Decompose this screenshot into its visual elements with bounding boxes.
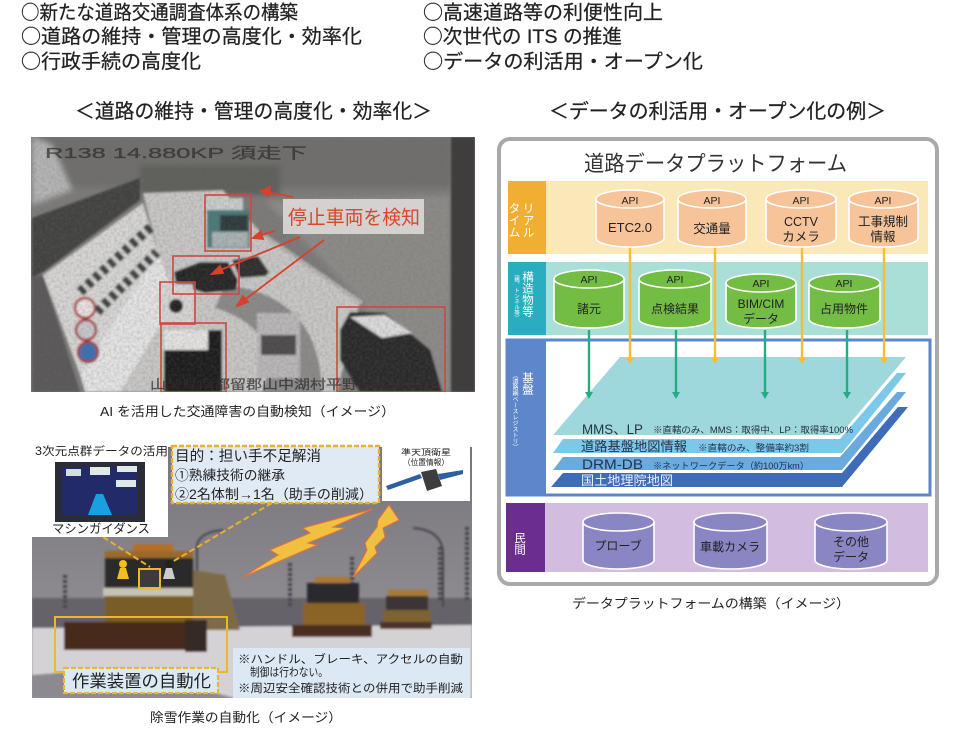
panel: machine guidance — [32, 443, 168, 537]
connector lines — [103, 503, 272, 567]
database: BIM/CIM data: BIM/CIM — [738, 297, 784, 311]
data layers: ※直轄のみ、MMS：取得中、LP：取得率100% — [653, 424, 853, 435]
caption: data platform: データプラットフォームの構築（イメージ） — [572, 596, 850, 611]
objectives list: left column — [21, 0, 362, 74]
band: structures: （橋、トンネル等） — [513, 271, 520, 320]
callout: purpose: ①熟練技術の継承 — [175, 468, 286, 483]
panel: machine guidance: 3次元点群データの活用 — [35, 444, 168, 458]
note panel: ※ハンドル、ブレーキ、アクセルの自動 — [238, 652, 463, 666]
database: CCTV camera — [766, 190, 836, 247]
database: construction restrictions — [849, 190, 918, 247]
objectives list: left column: ○行政手続の高度化 — [21, 45, 201, 74]
database: occupancy objects: 占用物件 — [820, 301, 868, 316]
note panel: 制御は行わない。 — [250, 665, 328, 679]
database: specifications: 諸元 — [577, 301, 601, 316]
icon: operator markers — [117, 560, 175, 579]
callout: purpose: ②2名体制→1名（助手の削減） — [175, 486, 373, 502]
database: other data: データ — [833, 549, 869, 564]
heading: data utilisation: ＜データの利活用・オープン化の例＞ — [549, 100, 886, 123]
photo: AI incident detection — [31, 137, 475, 392]
caption: AI detection: AI を活用した交通障害の自動検知（イメージ） — [100, 404, 395, 419]
objectives list: right column: ○データの利活用・オープン化 — [423, 45, 703, 74]
note panel — [233, 648, 470, 698]
database: ETC2.0: API — [622, 195, 638, 207]
band: realtime: リアル — [521, 202, 535, 238]
band: structures: 構造物等 — [521, 271, 534, 317]
database: traffic volume: API — [704, 195, 720, 207]
objectives list: left column: ○道路の維持・管理の高度化・効率化 — [21, 20, 362, 49]
monitor highlight frame — [139, 569, 160, 588]
detection arrows — [212, 187, 324, 306]
database: construction restrictions: 工事規制 — [858, 214, 908, 229]
photo: snow removal automation — [32, 443, 472, 698]
panel: QZSS satellite: 準天頂衛星 — [401, 447, 451, 457]
database: traffic volume — [678, 190, 746, 247]
callout: purpose: 目的：担い手不足解消 — [175, 448, 321, 465]
database: onboard camera — [694, 513, 767, 569]
heading: road maintenance: ＜道路の維持・管理の高度化・効率化＞ — [75, 100, 432, 123]
camera overlay text: R138 14.880KP 須走下 — [45, 145, 307, 162]
band: private sector — [506, 503, 928, 572]
database: other data: その他 — [833, 535, 869, 549]
database: construction restrictions: 情報 — [870, 230, 896, 244]
detection boxes — [160, 195, 445, 392]
database: inspection results: 点検結果 — [651, 302, 699, 316]
panel: QZSS satellite — [382, 445, 470, 501]
panel: machine guidance: マシンガイダンス — [52, 521, 150, 536]
data layers: 国土地理院地図 — [581, 473, 673, 488]
yellow arrows — [626, 247, 888, 364]
database: inspection results — [639, 270, 711, 328]
database: CCTV camera: API — [793, 195, 809, 207]
work equipment highlight frame — [55, 617, 227, 672]
data layers — [551, 357, 908, 488]
note panel: ※周辺安全確認技術との併用で助手削減 — [238, 681, 464, 695]
database: traffic volume: 交通量 — [693, 222, 731, 236]
band: structures — [508, 262, 928, 335]
band: base registry — [507, 340, 930, 495]
icon: lightning bolt to lead truck — [243, 509, 373, 577]
database: BIM/CIM data: データ — [743, 311, 779, 326]
database: ETC2.0 — [596, 190, 664, 247]
database: probe — [583, 513, 654, 569]
data layers: MMS、LP — [582, 421, 643, 437]
database: specifications: API — [581, 274, 597, 286]
caption: snow removal: 除雪作業の自動化（イメージ） — [150, 710, 342, 725]
band: base registry: （道路網ベースレジストリ） — [511, 372, 518, 450]
panel: QZSS satellite: （位置情報） — [403, 457, 449, 467]
data layers: ※直轄のみ、整備率約3割 — [698, 442, 809, 453]
band: base registry: 基盤 — [521, 372, 534, 395]
database: inspection results: API — [667, 274, 683, 286]
band: private sector: 民間 — [513, 532, 526, 556]
callout: stopped vehicle detected: 停止車両を検知 — [288, 207, 420, 229]
database: ETC2.0: ETC2.0 — [608, 220, 652, 235]
database: construction restrictions: API — [875, 195, 891, 207]
objectives list: right column — [423, 0, 703, 74]
database: onboard camera: 車載カメラ — [700, 540, 760, 554]
callout: purpose — [172, 446, 379, 503]
database: occupancy objects — [809, 274, 880, 328]
data layers: ※ネットワークデータ（約100万km） — [653, 460, 809, 471]
data layers: DRM-DB — [582, 456, 643, 472]
band: realtime: タイム — [507, 202, 521, 238]
label: automated work equipment — [64, 668, 218, 693]
database: CCTV camera: CCTV — [784, 215, 819, 229]
green arrows — [585, 330, 851, 399]
database: other data — [815, 513, 887, 569]
panel: road data platform — [499, 139, 937, 584]
icon: lightning bolt to second truck — [353, 505, 399, 577]
database: BIM/CIM data — [726, 274, 796, 328]
location overlay text: 山梨県南都留郡山中湖村平野 — [150, 377, 358, 392]
database: occupancy objects: API — [836, 278, 852, 290]
database: BIM/CIM data: API — [753, 278, 769, 290]
database: CCTV camera: カメラ — [782, 230, 820, 244]
database: probe: プローブ — [594, 538, 642, 553]
database: specifications — [554, 270, 624, 328]
platform title: 道路データプラットフォーム — [584, 152, 847, 176]
callout: stopped vehicle detected — [283, 199, 424, 234]
data layers: 道路基盤地図情報 — [581, 439, 687, 454]
band: realtime — [507, 181, 928, 254]
label: automated work equipment: 作業装置の自動化 — [72, 672, 211, 691]
objectives list: right column: ○次世代の ITS の推進 — [423, 20, 622, 49]
